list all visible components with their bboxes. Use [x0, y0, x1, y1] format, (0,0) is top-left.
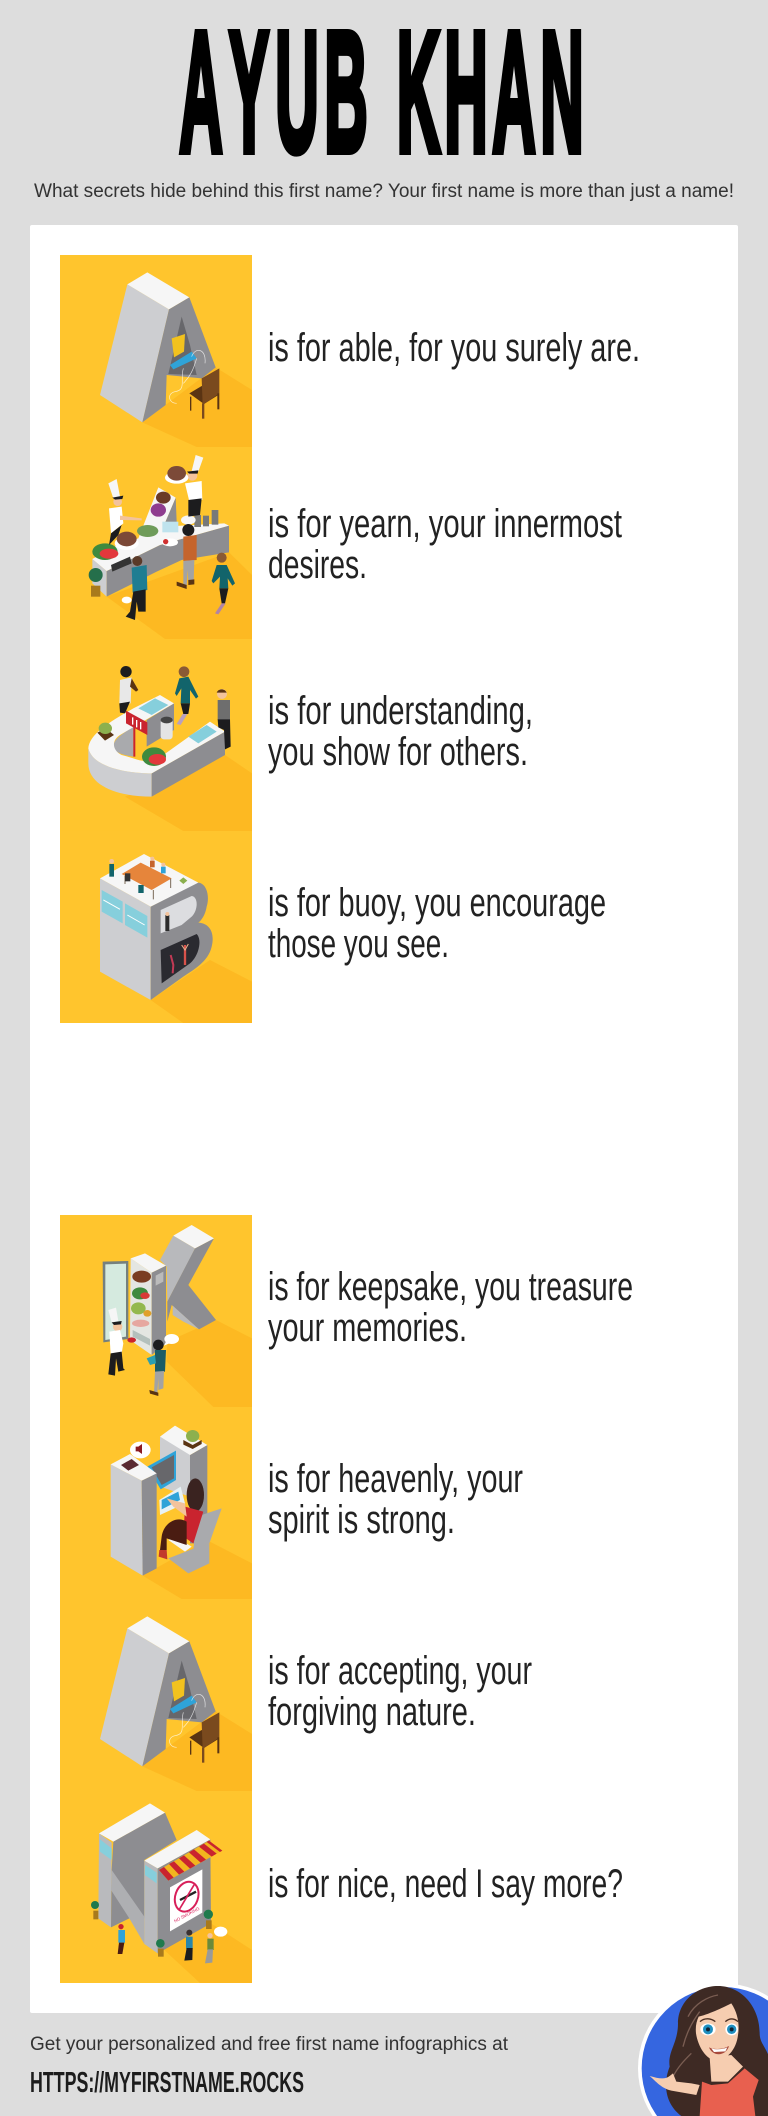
row: letter A second — [60, 1599, 532, 1791]
person: chef left — [108, 479, 142, 545]
title: AYUB KHAN — [179, 0, 584, 188]
footer url: HTTPS://MYFIRSTNAME.ROCKS — [30, 2067, 304, 2099]
people: meeting — [109, 857, 187, 893]
sign: cutlery — [126, 711, 147, 757]
row: letter Y — [60, 447, 622, 639]
top — [700, 2068, 759, 2116]
tile: B illustration — [60, 831, 252, 1023]
hair — [666, 1986, 768, 2116]
caption: K: your memories. — [268, 1306, 467, 1350]
meeting table — [122, 863, 172, 899]
chair — [168, 1508, 222, 1573]
people — [118, 1924, 214, 1963]
food: roast on plate — [165, 466, 188, 484]
plants — [91, 1901, 213, 1957]
tile: U illustration — [60, 639, 252, 831]
caption: H: is for heavenly, your — [268, 1457, 523, 1501]
person: standing in window — [165, 912, 169, 931]
row: letter A — [60, 255, 640, 447]
bin — [161, 717, 173, 739]
windows — [102, 890, 147, 938]
avatar — [638, 1983, 768, 2116]
caption: B: is for buoy, you encourage — [268, 881, 606, 925]
panel: white card — [30, 225, 738, 2013]
row: letter N — [60, 1791, 623, 1983]
fridge — [103, 1253, 166, 1355]
food: roast — [115, 532, 139, 550]
tile: H illustration — [60, 1407, 252, 1599]
person: customer — [147, 1340, 166, 1396]
caption: Y: is for yearn, your innermost — [268, 502, 622, 546]
caption: N: is for nice, need I say more? — [268, 1862, 623, 1906]
caption: U: is for understanding, — [268, 689, 533, 733]
awning — [159, 1841, 222, 1881]
row: letter U — [60, 639, 533, 831]
plant — [89, 568, 103, 597]
food: watermelon platter — [92, 543, 118, 560]
person: woman at desk — [159, 1478, 204, 1559]
plant box — [97, 723, 114, 741]
neck and arm — [650, 2055, 743, 2095]
windows — [100, 1839, 157, 1883]
person: customer blue — [122, 556, 147, 620]
caption: K: is for keepsake, you treasure — [268, 1265, 633, 1309]
book — [121, 1459, 139, 1471]
poster: no smoking: NO SMOKING — [173, 1906, 201, 1924]
monitor — [147, 1451, 176, 1489]
watermelon — [142, 747, 166, 766]
person: woman apron — [119, 666, 138, 713]
caption: U: you show for others. — [268, 730, 528, 774]
person: woman teal — [175, 666, 198, 725]
caption: Y: desires. — [268, 543, 367, 587]
tile: A illustration — [60, 1599, 252, 1791]
subtitle: What secrets hide behind this first name? Your first name is more than just a name! — [34, 181, 734, 202]
caption: B: those you see. — [268, 922, 449, 966]
person: woman teal — [212, 553, 235, 614]
tile: K illustration — [60, 1215, 252, 1407]
row: letter H — [60, 1407, 523, 1599]
plant — [183, 1430, 202, 1449]
label box — [111, 557, 132, 572]
person: man vest — [217, 689, 231, 749]
climbers — [171, 944, 188, 973]
tile: A illustration — [60, 255, 252, 447]
caption: A second: is for accepting, your — [268, 1649, 532, 1693]
brows and smile — [700, 2019, 738, 2054]
speech bubble — [214, 1927, 227, 1937]
row: letter B — [60, 831, 606, 1023]
person: chef — [108, 1308, 136, 1376]
caption: H: spirit is strong. — [268, 1498, 455, 1542]
row: letter K — [60, 1215, 633, 1407]
caption: A second: forgiving nature. — [268, 1690, 476, 1734]
poster: no smoking — [170, 1869, 203, 1931]
tile: Y illustration — [60, 447, 252, 639]
eyes — [700, 2023, 738, 2035]
person: chef right — [185, 455, 203, 517]
footer text: Get your personalized and free first name infographics at — [30, 2034, 509, 2055]
speech bubble: muted speaker — [130, 1442, 151, 1458]
speech bubble — [164, 1334, 179, 1346]
person: customer orange — [162, 524, 197, 589]
face — [696, 2003, 739, 2061]
tile: N illustration — [60, 1791, 252, 1983]
desk — [159, 1487, 185, 1515]
